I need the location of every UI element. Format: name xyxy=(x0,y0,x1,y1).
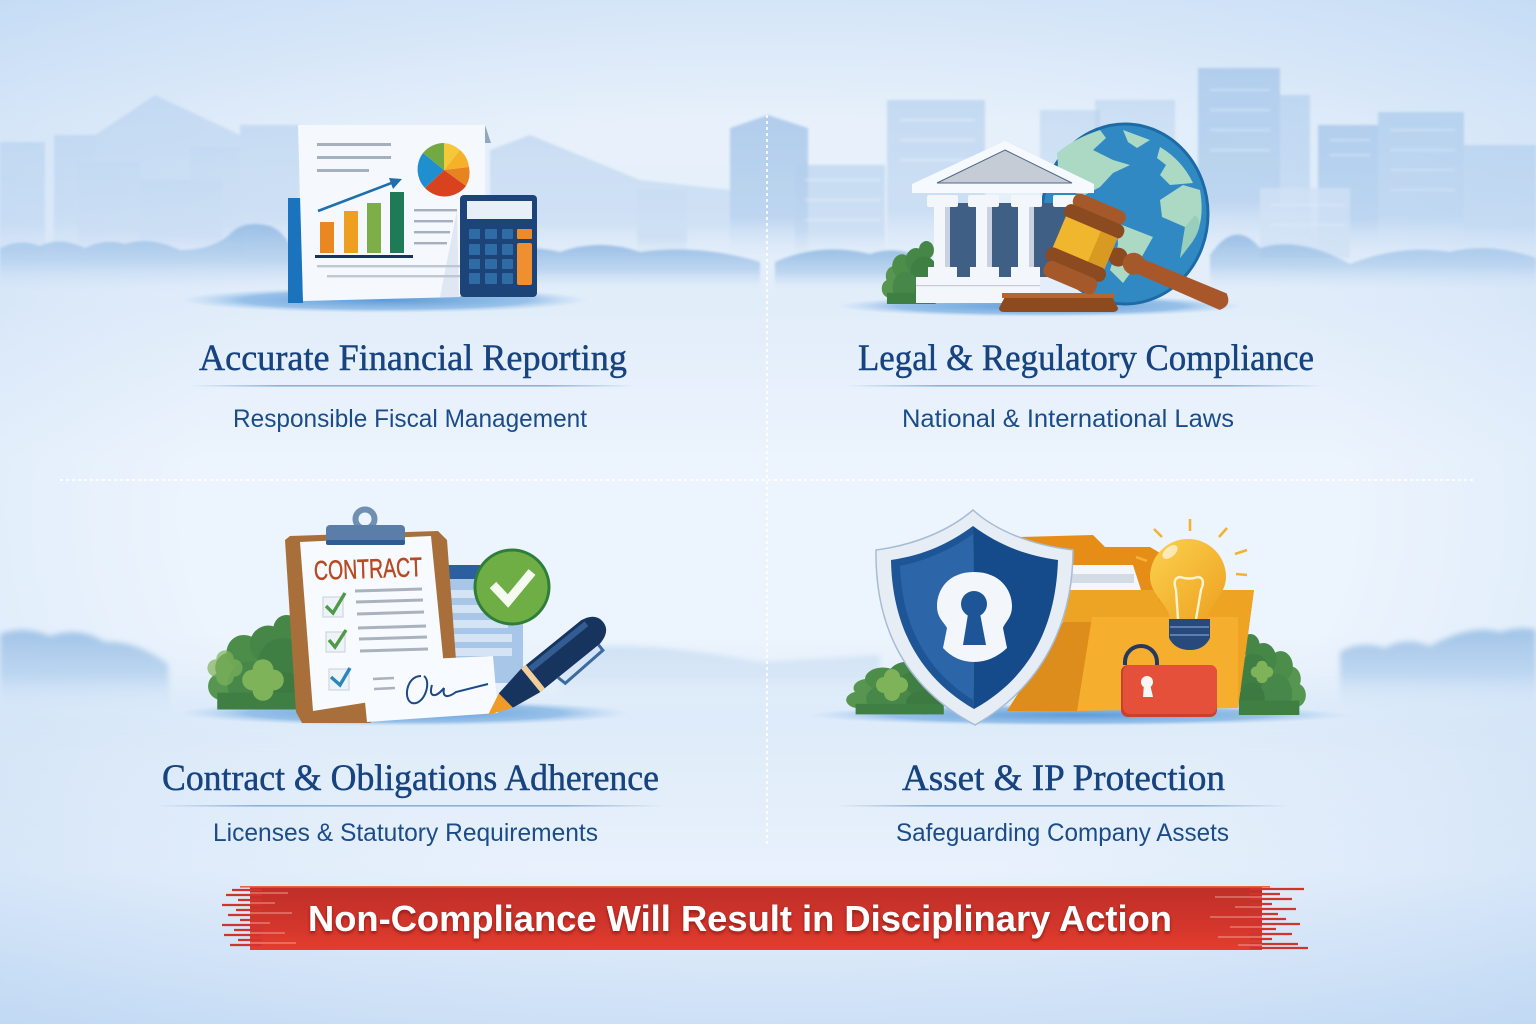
heading: Contract & Obligations Adherence xyxy=(162,758,659,799)
subheading: Licenses & Statutory Requirements xyxy=(213,819,598,847)
vertical dotted divider xyxy=(766,115,768,845)
warning banner: Non-Compliance Will Result in Disciplinary Action xyxy=(308,898,1172,939)
top skyline silhouettes xyxy=(0,68,1536,262)
icon: light bulb xyxy=(1136,519,1247,650)
icon: red padlock xyxy=(1121,646,1217,717)
icon: courthouse xyxy=(912,141,1094,303)
subheading: National & International Laws xyxy=(902,405,1234,433)
icon: green check badge xyxy=(475,550,549,624)
panel: accurate financial reporting xyxy=(180,125,635,433)
heading: Accurate Financial Reporting xyxy=(199,338,627,379)
keyhole emblem xyxy=(937,572,1012,662)
icon: gavel xyxy=(999,190,1245,346)
icon: report and calculator xyxy=(180,125,590,313)
icon: pen xyxy=(479,610,618,734)
lower tree line xyxy=(0,628,1536,712)
heading: Asset & IP Protection xyxy=(902,758,1225,799)
icon: bushes xyxy=(846,634,1306,715)
warning banner xyxy=(222,886,1308,950)
icon: calculator xyxy=(460,195,537,297)
icon: contract clipboard xyxy=(180,510,630,734)
panel: legal and regulatory compliance xyxy=(835,124,1325,433)
arrow: growth xyxy=(318,178,402,211)
horizontal dotted divider xyxy=(60,479,1476,481)
panel: asset and ip protection xyxy=(808,510,1348,847)
icon: shield xyxy=(876,510,1073,725)
subheading: Responsible Fiscal Management xyxy=(233,405,587,433)
icon: folder xyxy=(1007,535,1254,711)
icon: shield, folder, bulb and lock xyxy=(808,510,1348,726)
icon: globe xyxy=(1042,124,1208,304)
icon: bush xyxy=(207,615,307,710)
pie chart xyxy=(418,143,470,196)
icon: bush xyxy=(882,241,938,304)
icon: courthouse, globe and gavel xyxy=(835,124,1245,346)
checklist xyxy=(323,589,428,690)
icon: clipboard xyxy=(285,510,456,723)
light streaks in brush ends xyxy=(250,893,1262,945)
contract title: CONTRACT xyxy=(313,552,422,586)
subheading: Safeguarding Company Assets xyxy=(896,819,1229,847)
top tree line xyxy=(0,224,1536,290)
brush feathering right xyxy=(1250,889,1308,948)
brush feathering left xyxy=(222,890,262,945)
heading: Legal & Regulatory Compliance xyxy=(858,338,1314,379)
icon: back document xyxy=(435,565,523,683)
bar chart xyxy=(315,192,413,258)
panel: contract and obligations adherence xyxy=(155,510,665,847)
icon: signature card xyxy=(361,656,498,722)
